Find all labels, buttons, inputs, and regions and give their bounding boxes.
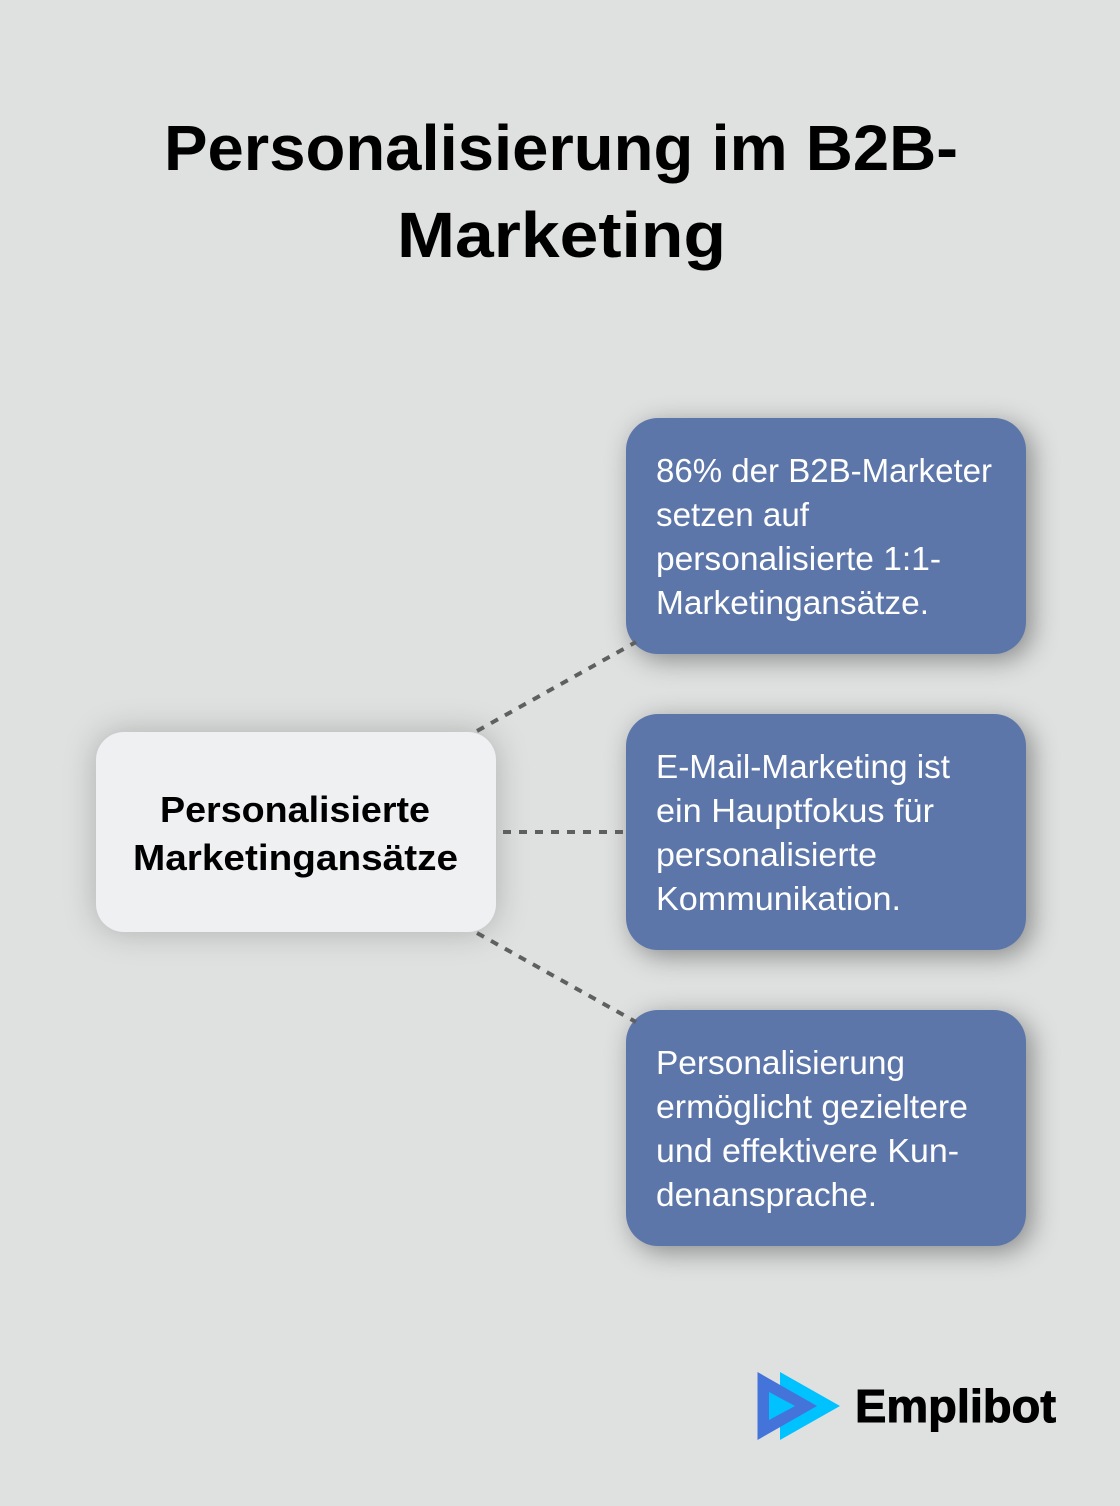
panel: bottom card: und effektivere Kun- bbox=[656, 1132, 959, 1169]
panel: top card: Marketingansätze. bbox=[656, 584, 929, 621]
panel: middle card: personalisierte bbox=[656, 836, 877, 873]
icon: play triangles bbox=[758, 1372, 840, 1440]
panel: bottom card: Personalisierung bbox=[656, 1044, 905, 1081]
panel: bottom card: denansprache. bbox=[656, 1176, 877, 1213]
panel: middle card: Kommunikation. bbox=[656, 880, 901, 917]
panel: middle card: ein Hauptfokus für bbox=[656, 792, 934, 829]
connector: central box to middle card bbox=[503, 830, 623, 834]
wordmark: Emplibot bbox=[855, 1380, 1056, 1432]
panel: top card bbox=[626, 418, 1026, 654]
title: Personalisierung im B2B- bbox=[164, 112, 958, 184]
panel: central concept box bbox=[96, 732, 496, 932]
logo: Emplibot bbox=[758, 1372, 1056, 1440]
panel: central concept box: Personalisierte bbox=[160, 789, 430, 830]
panel: top card: personalisierte 1:1- bbox=[656, 540, 941, 577]
panel: top card: 86% der B2B-Marketer bbox=[656, 452, 992, 489]
panel: middle card: E-Mail-Marketing ist bbox=[656, 748, 950, 785]
connector: central box to top card bbox=[477, 642, 636, 731]
panel: top card: setzen auf bbox=[656, 496, 810, 533]
title: Marketing bbox=[397, 199, 726, 271]
panel: bottom card bbox=[626, 1010, 1026, 1246]
connector: central box to bottom card bbox=[477, 933, 636, 1022]
panel: middle card bbox=[626, 714, 1026, 950]
panel: bottom card: ermöglicht gezieltere bbox=[656, 1088, 968, 1125]
panel: central concept box: Marketingansätze bbox=[133, 837, 458, 878]
title bbox=[164, 112, 958, 271]
